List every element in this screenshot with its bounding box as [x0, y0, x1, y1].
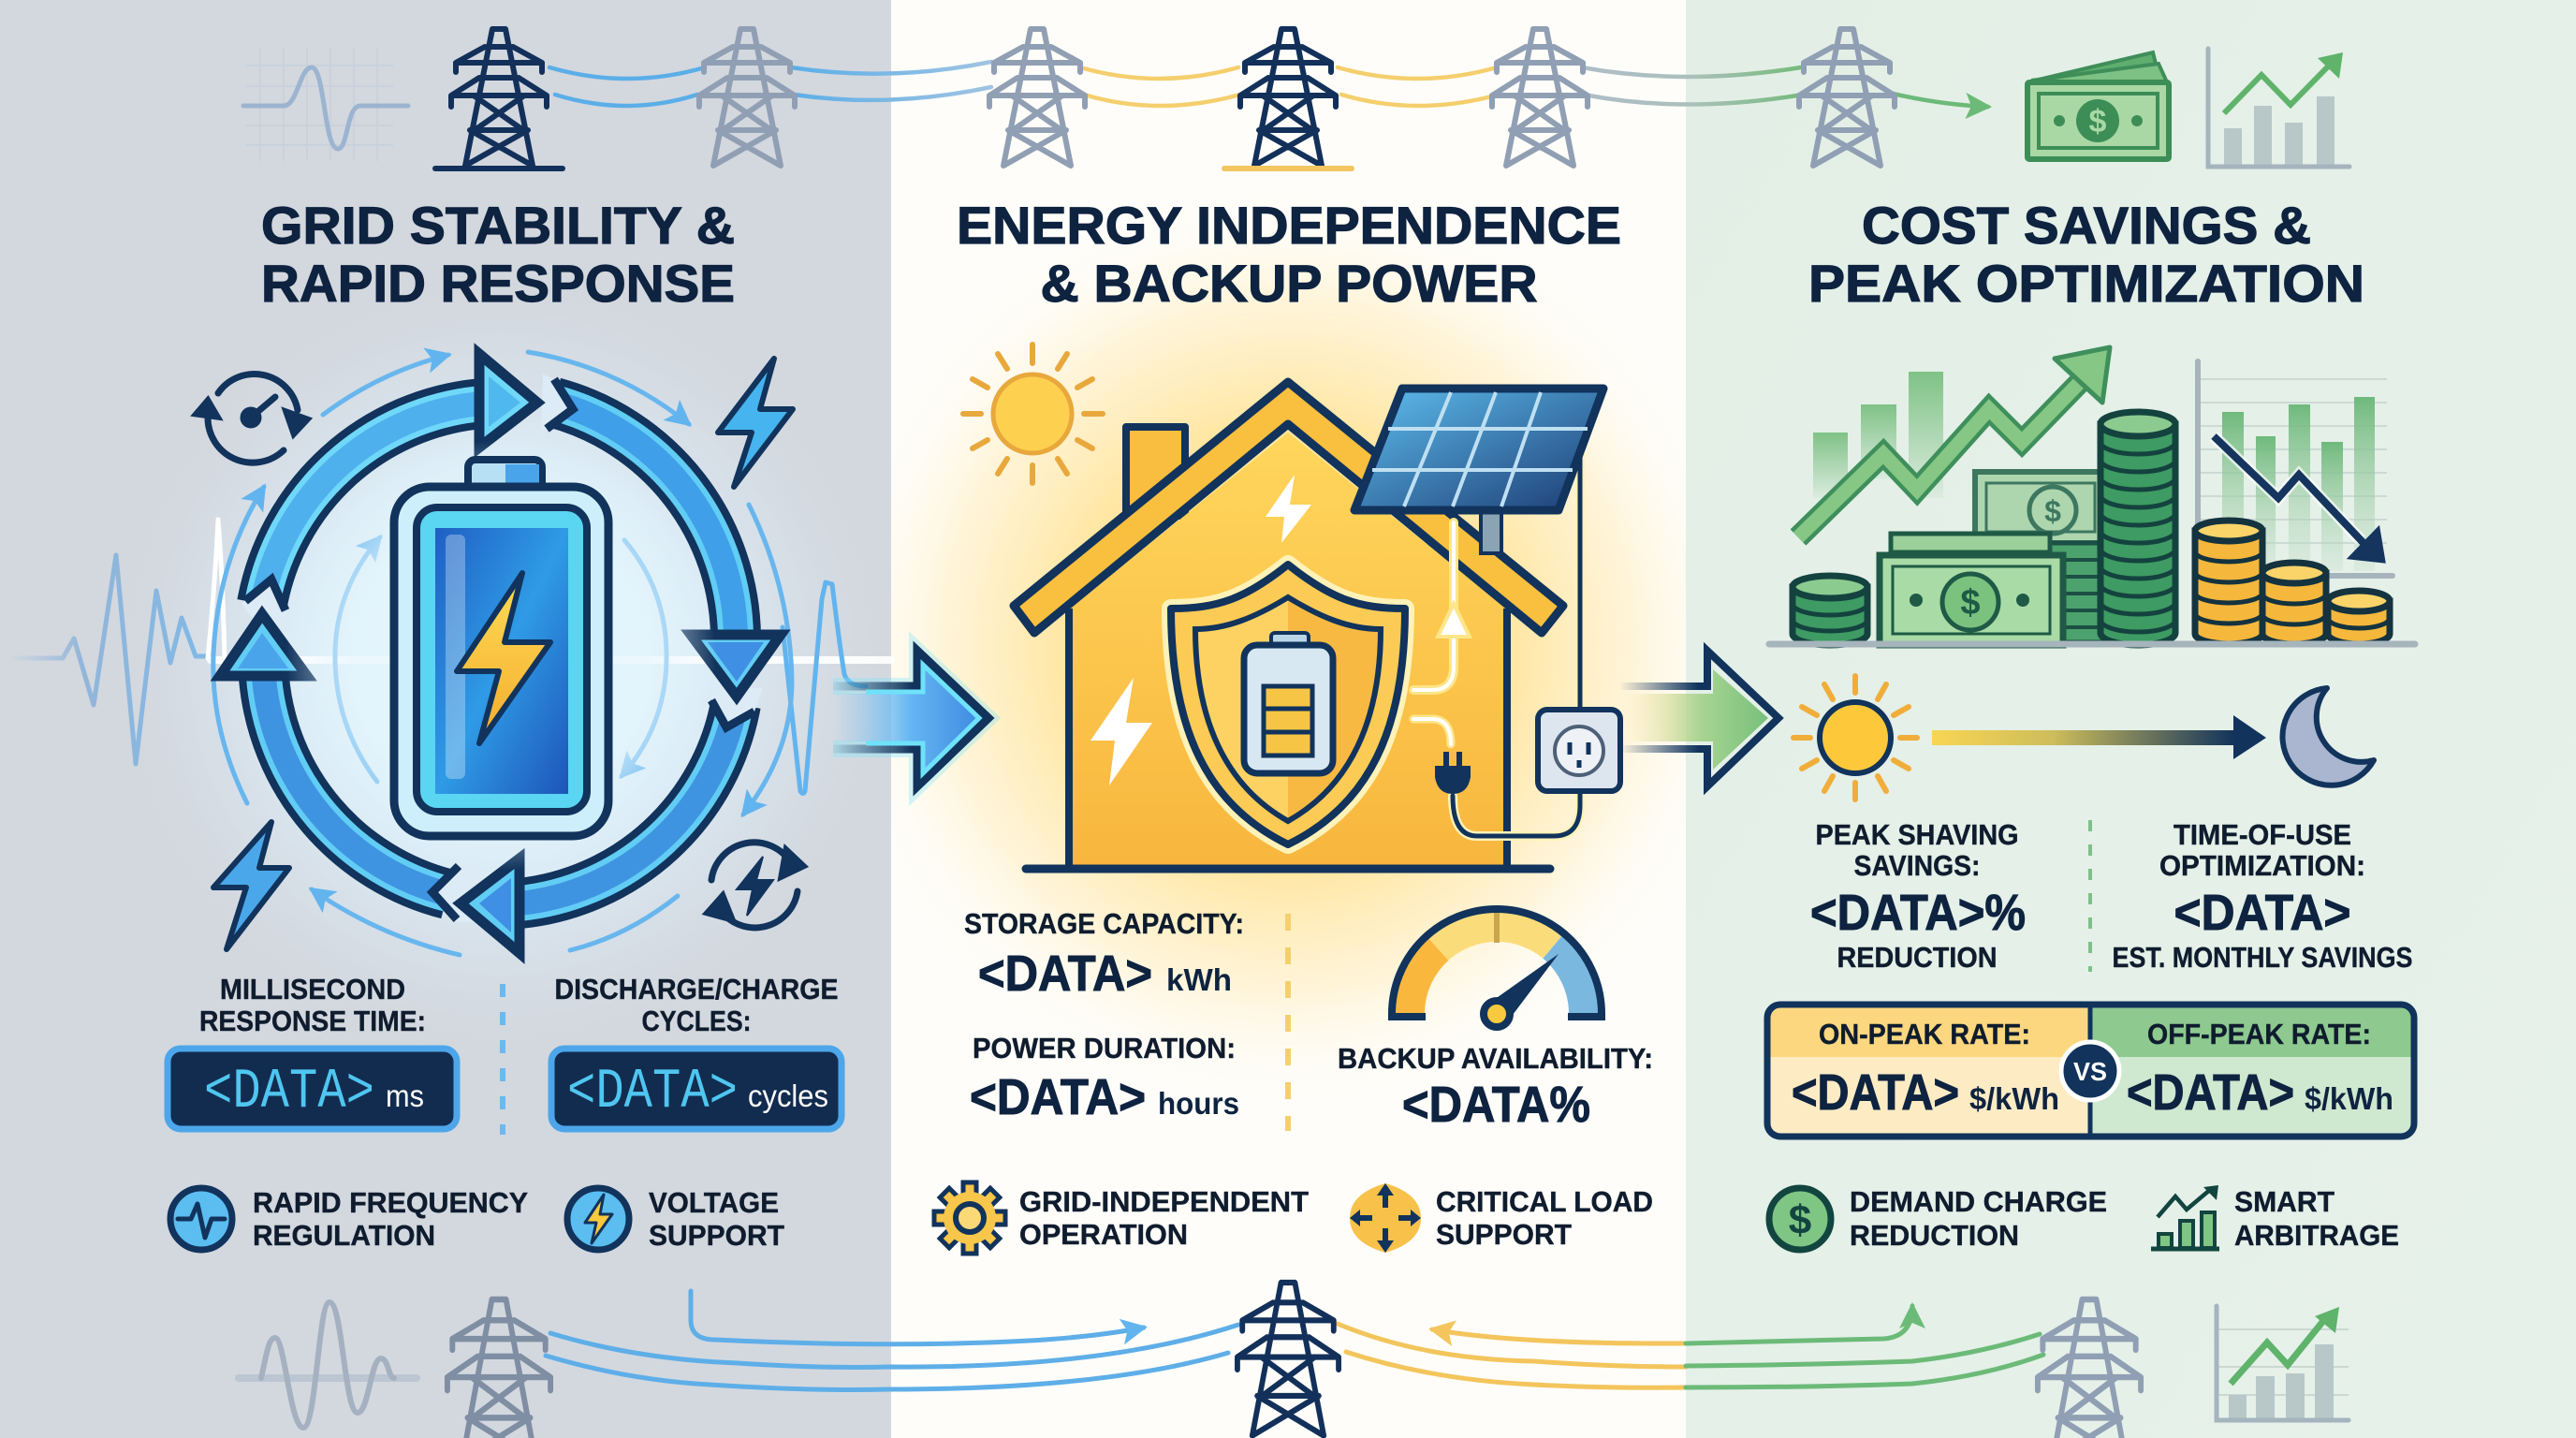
text block: time of use optimization: OPTIMIZATION: — [2159, 849, 2365, 882]
illustration: waves through battery cycle — [11, 520, 891, 794]
table: on-peak versus off-peak rates: OFF-PEAK RATE: — [2147, 1018, 2371, 1050]
divider — [2088, 820, 2092, 972]
gold coin stacks — [2195, 521, 2390, 644]
icon: sun for peak period — [1793, 676, 1917, 800]
front banknote: $ — [1960, 583, 1981, 623]
feature: voltage support: SUPPORT — [649, 1219, 784, 1252]
chart: right bars with falling trend — [2198, 361, 2393, 576]
feature: voltage support — [567, 1186, 784, 1252]
title line 2: peak optimization: PEAK OPTIMIZATION — [1808, 254, 2364, 313]
feature: smart arbitrage: ARBITRAGE — [2234, 1219, 2399, 1252]
metric box: cycles: <DATA> — [567, 1061, 738, 1124]
divider — [500, 984, 505, 1135]
feature: critical load support: CRITICAL LOAD — [1436, 1185, 1653, 1218]
text block: power duration — [970, 1032, 1239, 1125]
text block: backup availability — [1338, 1042, 1653, 1133]
arrow: peak to off-peak timeline — [1932, 715, 2266, 759]
text block: time of use optimization: EST. MONTHLY SAVINGS — [2112, 941, 2413, 974]
illustration: savings charts, cash and coins — [1769, 347, 2415, 645]
feature: rapid frequency regulation — [170, 1186, 528, 1252]
table: on-peak versus off-peak rates: $/kWh — [2305, 1081, 2393, 1116]
text block: peak shaving savings: REDUCTION — [1837, 941, 1998, 974]
green coin stack small — [1793, 576, 1867, 645]
solar pole — [1481, 511, 1501, 553]
text block: peak shaving savings: PEAK SHAVING — [1816, 818, 2018, 851]
text block: power duration: hours — [1158, 1086, 1239, 1121]
text block: storage capacity: kWh — [1166, 962, 1232, 997]
feature: grid independent operation: OPERATION — [1019, 1218, 1188, 1251]
text block: discharge charge cycles — [554, 973, 839, 1037]
icon: top grid waveform — [243, 48, 408, 161]
feature: voltage support: VOLTAGE — [649, 1186, 779, 1219]
table: on-peak versus off-peak rates: $/kWh — [1969, 1081, 2059, 1116]
feature: critical load support — [1350, 1183, 1653, 1253]
text block: millisecond response — [199, 973, 426, 1037]
metric box: cycles — [551, 1049, 842, 1129]
text block: storage capacity: <DATA> — [978, 946, 1152, 1002]
table: on-peak versus off-peak rates: <DATA> — [1792, 1064, 1959, 1121]
table: on-peak versus off-peak rates: VS — [2073, 1057, 2107, 1086]
feature: demand charge reduction: DEMAND CHARGE — [1850, 1185, 2107, 1218]
chimney — [1126, 427, 1185, 516]
chart: top mini growth chart — [2208, 49, 2349, 167]
title: grid stability and rapid response: GRID STABILITY & — [261, 196, 735, 255]
icon: top tower 3 — [989, 29, 1085, 166]
text block: discharge charge cycles: DISCHARGE/CHARGE — [554, 973, 839, 1005]
text block: peak shaving savings — [1810, 818, 2026, 974]
icon: sun — [963, 345, 1103, 483]
back banknote — [1975, 472, 2106, 543]
feature: demand charge reduction: $ — [1789, 1197, 1811, 1243]
metric box: response time — [168, 1049, 457, 1129]
icon: bottom tower right — [2038, 1299, 2141, 1438]
wiring to outlet — [1413, 454, 1580, 836]
illustration: solar home with shield battery — [963, 345, 1620, 869]
feature: rapid frequency regulation: RAPID FREQUENCY — [253, 1186, 528, 1219]
illustration: battery rapid response cycle — [197, 352, 803, 955]
icon: top dollar bills: $ — [2089, 104, 2107, 139]
text block: peak shaving savings: SAVINGS: — [1853, 849, 1981, 882]
text block: time of use optimization: TIME-OF-USE — [2174, 818, 2351, 851]
thin circulating arrows — [213, 352, 792, 955]
yellow glow behind house — [891, 187, 1686, 1105]
text block: millisecond response: RESPONSE TIME: — [199, 1005, 426, 1037]
bolt on left wall — [1090, 678, 1152, 785]
text block: peak shaving savings: <DATA>% — [1810, 885, 2026, 941]
wires: bottom green set — [1686, 1306, 2043, 1387]
table: on-peak versus off-peak rates — [1767, 1005, 2414, 1137]
panel: energy independence background — [891, 0, 1686, 1438]
shield with battery — [1171, 565, 1405, 844]
chart: bottom growth chart — [2217, 1306, 2349, 1420]
feature: critical load support: SUPPORT — [1436, 1218, 1572, 1251]
icon: top tower 2 — [699, 29, 795, 166]
chart: fading background bars — [1813, 372, 1943, 498]
wires: top blue, yellow and green spans — [549, 62, 1988, 107]
icon: charge refresh — [708, 843, 803, 928]
icon: top dollar bills — [2027, 52, 2169, 159]
text block: time of use optimization: <DATA> — [2174, 885, 2351, 941]
savings baseline — [1769, 640, 2415, 648]
title: cost savings: COST SAVINGS & — [1862, 196, 2311, 255]
ground line — [1026, 865, 1550, 873]
ring arrow heads — [220, 354, 781, 953]
panel: grid stability background — [0, 0, 891, 1438]
stack edges — [2050, 543, 2106, 642]
title line 2: backup power: & BACKUP POWER — [1041, 254, 1537, 313]
table: on-peak versus off-peak rates: ON-PEAK RATE: — [1819, 1018, 2030, 1050]
feature: demand charge reduction — [1769, 1185, 2107, 1252]
icon: bottom waveform — [239, 1302, 417, 1428]
icon: lightning bottom left — [213, 822, 289, 949]
arrow: rising trend — [1798, 347, 2110, 537]
metric box: response time: ms — [386, 1078, 424, 1113]
bottom transmission line strip — [239, 1283, 2349, 1438]
wall outlet — [1538, 710, 1620, 791]
metric box: cycles: cycles — [748, 1078, 828, 1113]
icon: top tower 6 — [1799, 29, 1895, 166]
icon: speed gauge — [197, 374, 307, 462]
house wall — [1069, 433, 1507, 869]
wires: bottom yellow set — [1338, 1324, 1686, 1387]
front banknote — [1880, 534, 2063, 645]
battery — [285, 440, 716, 871]
icon: backup availability gauge — [1392, 909, 1602, 1027]
text block: power duration: <DATA> — [970, 1069, 1146, 1125]
text block: discharge charge cycles: CYCLES: — [642, 1005, 751, 1037]
feature: grid independent operation: GRID-INDEPENDENT — [1019, 1185, 1309, 1218]
panel: cost savings background — [1686, 0, 2576, 1438]
metric box: response time: <DATA> — [204, 1061, 374, 1124]
text block: time of use optimization — [2112, 818, 2413, 974]
text block: backup availability: <DATA% — [1402, 1077, 1590, 1133]
icon: bottom tower center — [1237, 1283, 1339, 1436]
icon: bottom tower left — [447, 1299, 550, 1438]
ring arrow bands — [242, 374, 763, 922]
feature: demand charge reduction: REDUCTION — [1850, 1219, 2019, 1252]
top transmission line strip — [243, 29, 2349, 169]
feature: rapid frequency regulation: REGULATION — [253, 1219, 435, 1252]
roof — [1014, 382, 1563, 633]
feature: smart arbitrage: SMART — [2234, 1185, 2334, 1218]
feature: smart arbitrage — [2151, 1185, 2399, 1252]
icon: crescent moon — [2283, 688, 2374, 785]
icon: top tower 1 — [435, 29, 563, 169]
arrow: energy independence to cost savings — [1619, 651, 1778, 786]
table: on-peak versus off-peak rates: <DATA> — [2127, 1064, 2294, 1121]
arrow: grid stability to energy independence — [833, 651, 988, 786]
wires: bottom blue set — [546, 1291, 1238, 1389]
solar panel — [1354, 389, 1603, 510]
plug — [1435, 752, 1471, 794]
title line 2: rapid response: RAPID RESPONSE — [261, 254, 735, 313]
bolts on wall — [1266, 475, 1311, 543]
green coin stack tall — [2100, 412, 2175, 645]
divider — [1285, 914, 1291, 1131]
text block: power duration: POWER DURATION: — [973, 1032, 1236, 1064]
text block: millisecond response: MILLISECOND — [220, 973, 405, 1005]
feature: grid independent operation — [919, 1167, 1309, 1269]
icon: lightning top right — [718, 359, 793, 487]
title: energy independence: ENERGY INDEPENDENCE — [957, 196, 1621, 255]
text block: storage capacity: STORAGE CAPACITY: — [964, 907, 1244, 940]
blue glow behind battery — [117, 281, 885, 1049]
icon: top tower 4 — [1224, 29, 1352, 169]
text block: storage capacity — [964, 907, 1244, 1002]
text block: backup availability: BACKUP AVAILABILITY: — [1338, 1042, 1653, 1075]
back banknote: $ — [2044, 494, 2061, 528]
icon: top tower 5 — [1492, 29, 1588, 166]
